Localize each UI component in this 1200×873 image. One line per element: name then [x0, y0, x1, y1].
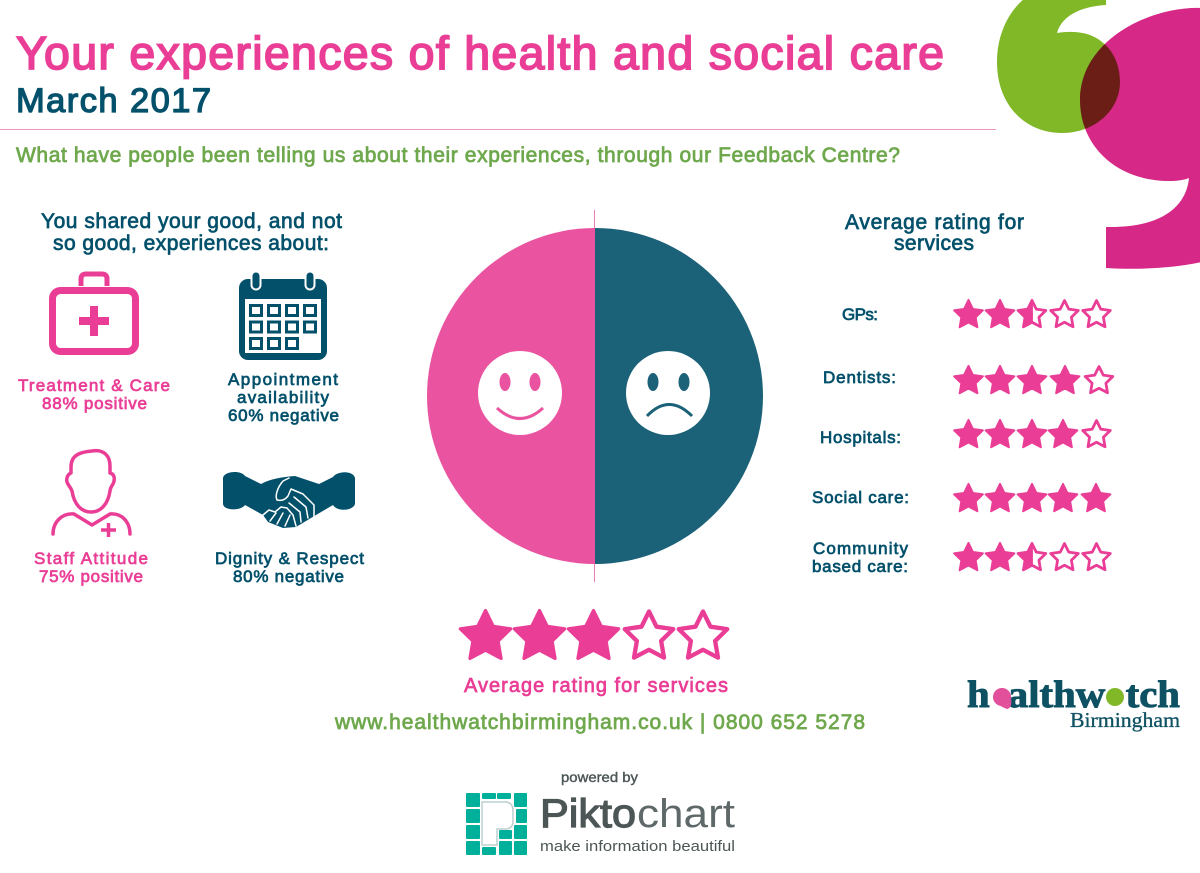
rating row: Community based care: Community — [813, 539, 908, 558]
rating row: Social care — [812, 484, 1110, 511]
powered by label: powered by — [561, 769, 638, 785]
label: appointment availability: availability — [237, 388, 330, 407]
logo: Piktochart: chart — [637, 792, 735, 836]
title: Your experiences of health and social care — [16, 27, 944, 79]
overall star rating — [460, 610, 727, 658]
icon: happy face — [478, 351, 562, 435]
rating row: Community based care: based care: — [812, 557, 908, 576]
topics heading: You shared your good, and not — [41, 210, 342, 233]
icon: calendar — [239, 272, 327, 360]
rating row: Community based care — [812, 539, 1110, 576]
decorative quotation marks — [997, 0, 1200, 269]
label: appointment availability: 60% negative — [228, 406, 339, 425]
rating row: Dentists — [823, 366, 1113, 393]
logo: Piktochart: make information beautiful — [540, 839, 735, 855]
date heading: March 2017 — [16, 82, 211, 120]
label: dignity and respect: 80% negative — [233, 567, 344, 586]
topics heading: so good, experiences about: — [53, 232, 329, 255]
chart: positive and negative split circle — [427, 210, 763, 582]
label: appointment availability — [228, 370, 339, 425]
logo: healthwatch Birmingham: Birmingham — [1070, 708, 1180, 732]
topics heading — [41, 210, 342, 255]
label: appointment availability: Appointment — [228, 370, 338, 389]
subtitle: What have people been telling us about their experiences, through our Feedback Centre? — [16, 144, 900, 167]
ratings heading — [845, 211, 1024, 255]
icon: medical case — [52, 274, 136, 352]
logo: Piktochart — [466, 792, 735, 855]
label: staff attitude — [34, 549, 148, 586]
label: staff attitude: Staff Attitude — [34, 549, 148, 568]
rating row: Hospitals — [820, 420, 1110, 447]
rating row: GPs — [842, 300, 1110, 327]
ratings heading: Average rating for — [845, 211, 1024, 234]
icon: staff member — [53, 451, 130, 537]
icon: sad face — [626, 351, 710, 435]
label: treatment and care — [18, 376, 170, 413]
label: dignity and respect — [215, 549, 364, 586]
contact details: www.healthwatchbirmingham.co.uk | 0800 652 5278 — [334, 711, 865, 734]
logo: Piktochart: Pikto — [540, 792, 636, 836]
rating row: GPs: GPs: — [842, 305, 878, 324]
overall rating caption: Average rating for services — [464, 675, 728, 697]
rating row: Hospitals: Hospitals: — [820, 428, 901, 447]
logo: healthwatch Birmingham: healthwatch — [967, 674, 1180, 716]
rating row: Dentists: Dentists: — [823, 368, 896, 387]
rating row: Social care: Social care: — [812, 488, 909, 507]
icon: handshake — [223, 472, 355, 528]
label: treatment and care: 88% positive — [42, 394, 147, 413]
label: dignity and respect: Dignity & Respect — [215, 549, 364, 568]
label: staff attitude: 75% positive — [39, 567, 143, 586]
icon: Piktochart mark — [466, 793, 527, 855]
label: treatment and care: Treatment & Care — [18, 376, 170, 395]
panel: service ratings — [812, 211, 1113, 576]
panel: experience topics — [18, 210, 364, 586]
ratings heading: services — [894, 232, 974, 255]
